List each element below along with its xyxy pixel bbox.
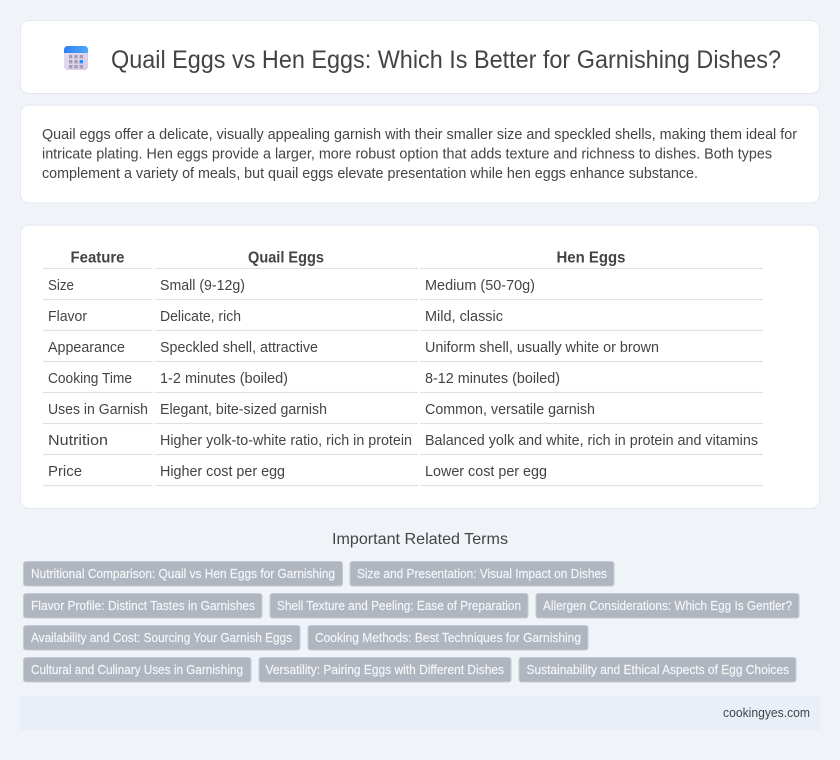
tag: Allergen Considerations: Which Egg Is Gentler? <box>543 599 792 613</box>
tag: Sustainability and Ethical Aspects of Egg Choices <box>526 663 789 677</box>
row: size: Size <box>48 278 74 294</box>
intro text: complement a variety of meals, but quail eggs elevate presentation while hen eggs enhance substance. <box>42 166 698 182</box>
tag: Versatility: Pairing Eggs with Different Dishes <box>266 663 504 677</box>
tag <box>519 658 796 682</box>
heading: important related terms: Important Related Terms <box>332 531 508 548</box>
row: size <box>48 278 535 294</box>
row: nutrition: Higher yolk-to-white ratio, rich in protein <box>160 433 412 449</box>
tag <box>536 594 799 618</box>
row: appearance <box>48 340 659 356</box>
row: appearance: Appearance <box>48 340 125 356</box>
row: cooking time: 8-12 minutes (boiled) <box>425 371 560 387</box>
row: cooking time: Cooking Time <box>48 371 132 387</box>
tag: Cultural and Culinary Uses in Garnishing <box>31 663 243 677</box>
row: uses in garnish: Elegant, bite-sized garnish <box>160 402 327 418</box>
row: price: Price <box>48 464 82 480</box>
panel: introduction <box>20 105 820 203</box>
row: uses in garnish <box>48 402 595 418</box>
row: flavor: Delicate, rich <box>160 309 241 325</box>
row: flavor: Mild, classic <box>425 309 503 325</box>
row: cooking time <box>48 371 560 387</box>
tag <box>259 658 511 682</box>
tags: related terms <box>24 562 799 682</box>
row: nutrition: Nutrition <box>48 433 108 449</box>
table header: Feature <box>70 250 125 266</box>
footer <box>20 696 820 730</box>
title: Quail Eggs vs Hen Eggs: Which Is Better for Garnishing Dishes? <box>111 46 781 74</box>
table header: Quail Eggs <box>248 250 324 266</box>
tag: Availability and Cost: Sourcing Your Garnish Eggs <box>31 631 292 645</box>
tag: Cooking Methods: Best Techniques for Garnishing <box>315 631 581 645</box>
table header <box>70 250 626 266</box>
row: appearance: Uniform shell, usually white or brown <box>425 340 659 356</box>
tag <box>270 594 528 618</box>
intro text: intricate plating. Hen eggs provide a larger, more robust option that adds texture and richness to dishes. Both types <box>42 146 772 162</box>
row: price <box>48 464 547 480</box>
row: cooking time: 1-2 minutes (boiled) <box>160 371 288 387</box>
tag <box>24 658 251 682</box>
tag <box>24 626 300 650</box>
table header: Hen Eggs <box>556 250 626 266</box>
row: uses in garnish: Common, versatile garnish <box>425 402 595 418</box>
row: flavor: Flavor <box>48 309 87 325</box>
row: uses in garnish: Uses in Garnish <box>48 402 148 418</box>
tag <box>308 626 588 650</box>
panel: comparison table <box>20 225 820 508</box>
tag: Size and Presentation: Visual Impact on Dishes <box>357 567 607 581</box>
intro text: Quail eggs offer a delicate, visually appealing garnish with their smaller size and speckled shells, making them ideal for <box>42 127 797 143</box>
row: price: Higher cost per egg <box>160 464 285 480</box>
tag <box>24 594 262 618</box>
tag: Flavor Profile: Distinct Tastes in Garnishes <box>31 599 255 613</box>
panel: header <box>20 20 820 94</box>
footer source text: cookingyes.com <box>723 706 810 720</box>
row: size: Small (9-12g) <box>160 278 245 294</box>
tag <box>350 562 614 586</box>
row: price: Lower cost per egg <box>425 464 547 480</box>
row: nutrition <box>48 433 758 449</box>
row: nutrition: Balanced yolk and white, rich in protein and vitamins <box>425 433 758 449</box>
row: size: Medium (50-70g) <box>425 278 535 294</box>
tag: Nutritional Comparison: Quail vs Hen Eggs for Garnishing <box>31 567 335 581</box>
icon: calendar <box>64 46 88 70</box>
row: appearance: Speckled shell, attractive <box>160 340 318 356</box>
tag: Shell Texture and Peeling: Ease of Preparation <box>277 599 521 613</box>
tag <box>24 562 342 586</box>
row: flavor <box>48 309 503 325</box>
intro text <box>42 127 797 182</box>
